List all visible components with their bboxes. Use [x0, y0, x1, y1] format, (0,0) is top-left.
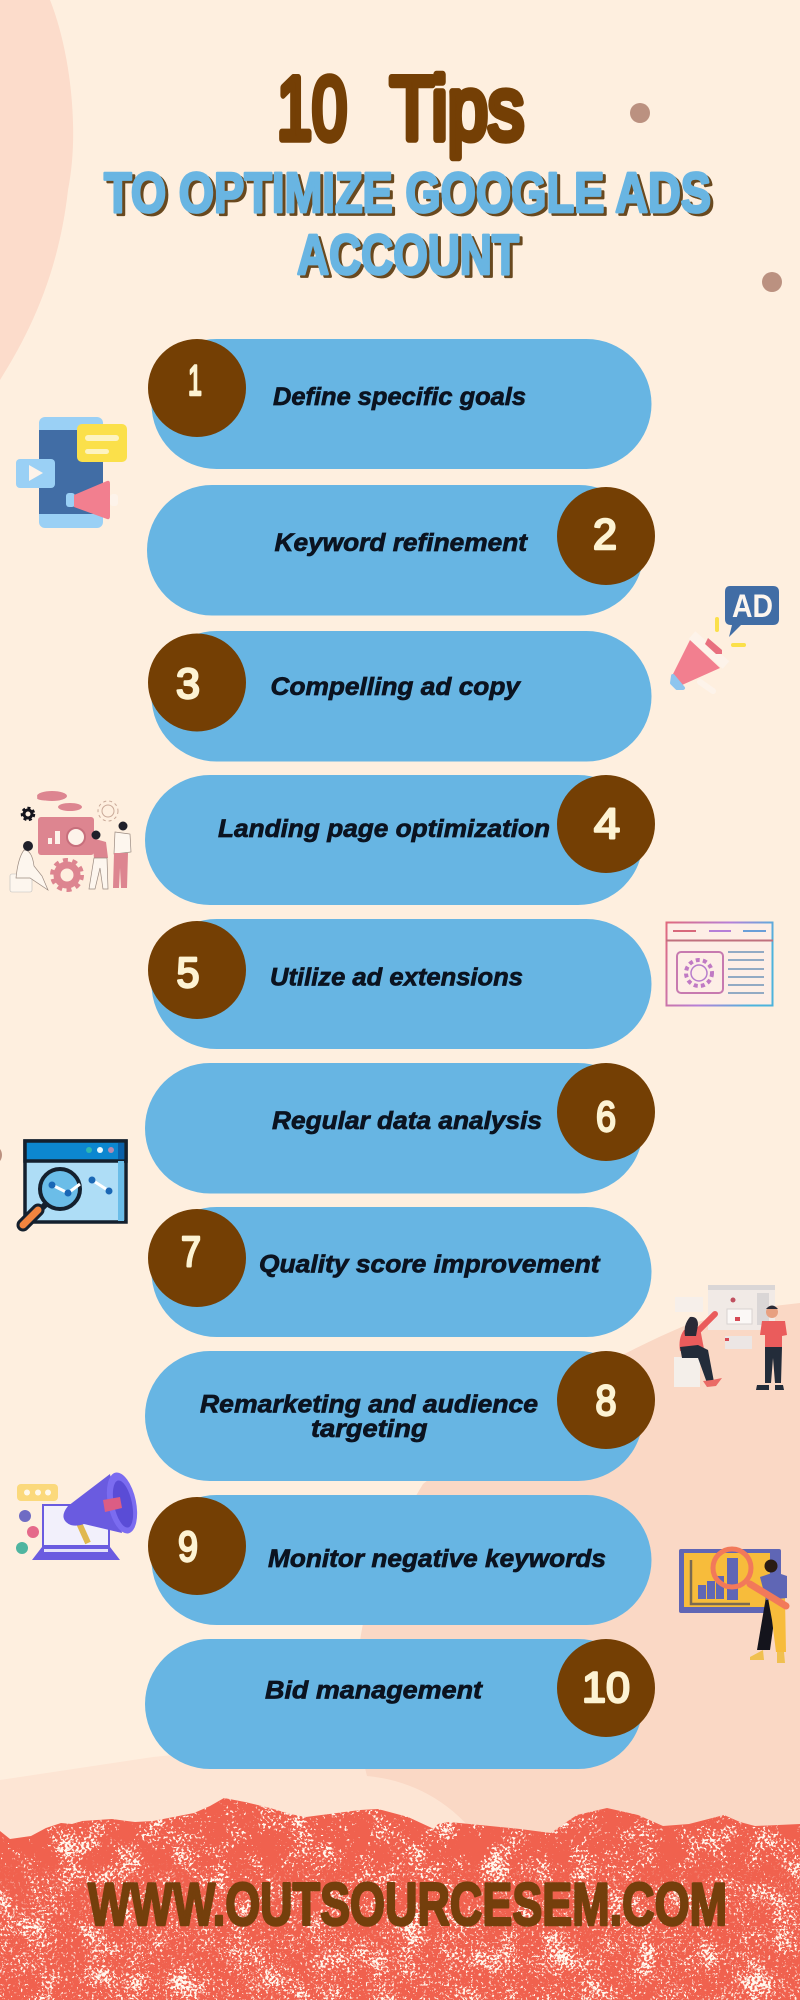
tip 10: Bid management — [265, 1676, 484, 1704]
decorative dot: left edge — [0, 1145, 2, 1165]
tip 3 — [148, 631, 652, 762]
decorative dot: right — [762, 272, 782, 292]
tip 2: Keyword refinement — [274, 529, 529, 557]
title: 10 — [277, 58, 347, 158]
tip 9: Monitor negative keywords — [268, 1545, 606, 1573]
icon: laptop with purple megaphone — [16, 1470, 142, 1560]
tip 6: 6 — [596, 1093, 616, 1141]
tip 4 — [145, 775, 655, 905]
background blob: top left — [0, 0, 73, 380]
tip 3: 3 — [176, 660, 200, 708]
subtitle — [104, 161, 714, 290]
tip 8: Remarketing and audience — [200, 1390, 538, 1418]
tip 5: 5 — [176, 949, 200, 997]
tip 7: 7 — [181, 1228, 201, 1276]
icon: two people at a board — [674, 1285, 787, 1390]
decorative dot: upper — [630, 103, 650, 123]
subtitle: ACCOUNT — [297, 223, 519, 287]
tip 6: Regular data analysis — [272, 1107, 542, 1135]
tip 5 — [148, 919, 652, 1049]
tip 8 — [145, 1351, 655, 1481]
icon: AD megaphone — [672, 586, 779, 691]
tip 10 — [145, 1639, 655, 1769]
tip 3: Compelling ad copy — [270, 673, 521, 701]
tip 5: Utilize ad extensions — [270, 964, 523, 992]
icon: settings web page — [666, 922, 773, 1006]
tip 1: Define specific goals — [273, 383, 526, 411]
tip 2: 2 — [593, 511, 617, 559]
tip 8: targeting — [311, 1415, 428, 1443]
tip 8: 8 — [596, 1377, 616, 1425]
icon: AD megaphone: AD — [732, 588, 773, 624]
tip 6 — [145, 1063, 655, 1194]
icon: phone with video and megaphone — [16, 417, 127, 528]
title — [277, 58, 524, 158]
footer band — [0, 1790, 800, 2000]
icon: web analytics with magnifier — [23, 1141, 126, 1225]
tip 9 — [148, 1495, 652, 1625]
tip 1 — [148, 339, 652, 469]
title: Tips — [390, 58, 524, 158]
tip 9: 9 — [178, 1523, 198, 1571]
background blob: lower right — [357, 1303, 800, 1840]
tip 2 — [147, 485, 655, 616]
tip 7 — [148, 1207, 652, 1337]
tip 4: 4 — [594, 800, 620, 848]
tip 10: 10 — [582, 1664, 630, 1712]
icon: team analysing dashboard — [10, 791, 131, 892]
tip 4: Landing page optimization — [218, 815, 550, 843]
icon: man with magnifier and bar chart — [679, 1549, 787, 1663]
tip 1: 1 — [188, 357, 202, 405]
background blob: lower light layer — [0, 1700, 800, 1860]
subtitle: ACCOUNT — [300, 226, 522, 290]
tip 7: Quality score improvement — [259, 1250, 601, 1278]
